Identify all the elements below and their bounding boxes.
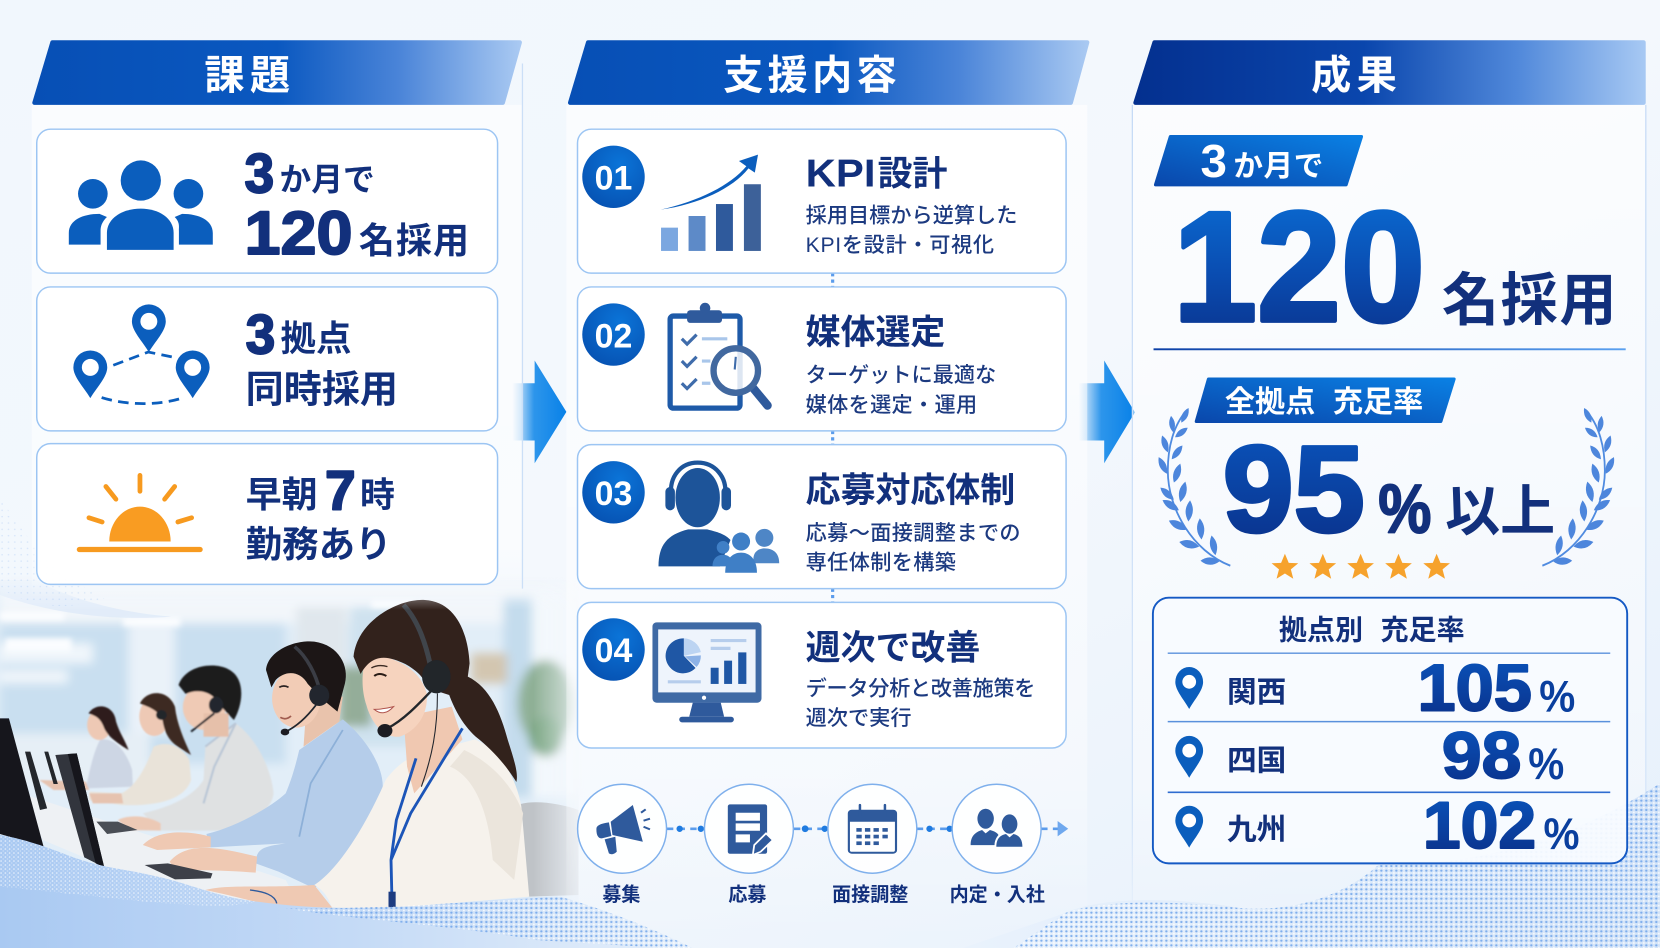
- panel: support: [566, 42, 1088, 942]
- table: fill rate by site: 充足率: [1381, 614, 1465, 645]
- step: apply: 応募: [728, 884, 766, 906]
- icon: three location pins: [73, 304, 210, 404]
- badge: 3 months: 3: [1201, 135, 1227, 187]
- row: Kyushu: 102: [1423, 789, 1536, 862]
- text: weekly improvement: [806, 629, 1035, 730]
- step: offer and onboarding: [950, 784, 1045, 906]
- top dotted wave: [4, 592, 170, 618]
- big number: 95% or more: 95: [1223, 421, 1365, 558]
- text: 7am early shifts: 7: [325, 458, 356, 521]
- text: KPI design: [806, 152, 1017, 257]
- row: Shikoku: %: [1528, 740, 1564, 789]
- heading: results: [1135, 42, 1644, 103]
- step: offer and onboarding: 内定・入社: [950, 884, 1045, 906]
- panel: results: [957, 42, 1660, 948]
- badge: all-site fill rate: 全拠点: [1225, 385, 1315, 419]
- text: 3 months, 120 hires: 3: [245, 142, 274, 205]
- row: Kansai: [1175, 651, 1575, 724]
- arrow: support to result: [1079, 361, 1135, 463]
- step: recruit: [578, 784, 667, 906]
- dotted wave: bottom right: [957, 783, 1660, 948]
- text: weekly improvement: 週次で実行: [806, 706, 912, 730]
- row: Kansai: 105: [1418, 651, 1532, 724]
- card 04: weekly improvement: [578, 602, 1066, 748]
- big number: 95% or more: %: [1378, 471, 1431, 548]
- big number: 95% or more: [1223, 421, 1555, 558]
- foreground monitors: [0, 718, 44, 847]
- text: media selection: 媒体選定: [806, 313, 945, 352]
- row: Shikoku: 98: [1442, 719, 1521, 792]
- keyboard: [145, 863, 212, 879]
- badge: all-site fill rate: 充足率: [1333, 385, 1423, 419]
- text: 3 sites simultaneous hiring: 3: [246, 303, 275, 366]
- card: early 7am shifts: [37, 444, 498, 584]
- text: KPI design: 採用目標から逆算した: [806, 203, 1017, 227]
- text: application handling: 応募〜面接調整までの: [806, 521, 1021, 545]
- far operator: [39, 693, 191, 805]
- stars: [1272, 554, 1450, 579]
- icon: people: [69, 160, 213, 250]
- row: Shikoku: 四国: [1227, 745, 1286, 778]
- panel: challenges: [32, 42, 522, 599]
- number badge 03: 03: [595, 475, 632, 513]
- icon: dashboard monitor: [652, 622, 762, 722]
- text: 7am early shifts: 時: [360, 476, 395, 515]
- process flow: [578, 784, 1068, 906]
- icon: growth chart: [661, 155, 761, 251]
- text: 3 sites simultaneous hiring: [246, 303, 398, 411]
- desk: [21, 793, 296, 900]
- card: 3 sites: [37, 287, 498, 431]
- second operator: [89, 744, 191, 805]
- icon: operator and team: [658, 463, 779, 573]
- number badge 04: [582, 618, 645, 681]
- text: 3 sites simultaneous hiring: 拠点: [281, 318, 351, 358]
- row: Kyushu: 九州: [1227, 814, 1286, 847]
- number badge 03: [582, 461, 645, 524]
- row: Kansai: %: [1539, 672, 1575, 721]
- badge: 3 months: [1156, 135, 1361, 187]
- monitors: [25, 752, 47, 810]
- text: application handling: 応募対応体制: [806, 471, 1015, 510]
- text: 3 months, 120 hires: か月で: [279, 162, 375, 198]
- heading: support: 支援内容: [723, 53, 901, 98]
- icon: sunrise: [79, 475, 200, 549]
- dotted wave: bottom left: [0, 835, 696, 948]
- badge: all-site fill rate: [1196, 379, 1454, 421]
- row: Kyushu: %: [1544, 810, 1580, 859]
- row: Kansai: 関西: [1227, 676, 1286, 709]
- laurel wreath left: [1156, 407, 1230, 566]
- step: interview scheduling: 面接調整: [832, 884, 908, 906]
- big number: 120 hires: 120: [1173, 180, 1425, 355]
- heading: challenges: [34, 42, 520, 103]
- text: 7am early shifts: 勤務あり: [246, 524, 392, 565]
- text: 7am early shifts: 早朝: [246, 474, 318, 515]
- fourth operator: [206, 719, 383, 888]
- dotted wave: top-left faint: [0, 498, 106, 606]
- text: application handling: 専任体制を構築: [806, 551, 956, 575]
- laurel wreath right: [1542, 407, 1617, 566]
- number badge 01: [582, 146, 645, 208]
- text: media selection: ターゲットに最適な: [806, 363, 996, 387]
- text: weekly improvement: データ分析と改善施策を: [806, 676, 1035, 701]
- front operator: [314, 739, 529, 908]
- heading: challenges: 課題: [204, 53, 295, 98]
- heading: results: 成果: [1311, 53, 1402, 98]
- step: recruit: 募集: [602, 884, 640, 906]
- text: 3 months, 120 hires: 120: [245, 199, 353, 268]
- text: 3 sites simultaneous hiring: 同時採用: [246, 368, 398, 411]
- text: 3 months, 120 hires: [245, 142, 469, 268]
- number badge 02: [582, 303, 645, 366]
- divider: [1154, 348, 1626, 350]
- card 02: media selection: [578, 287, 1066, 431]
- heading: support: [570, 42, 1087, 103]
- table: fill rate by site: [1153, 598, 1627, 863]
- step: interview scheduling: [828, 784, 917, 906]
- row: Kyushu: [1175, 789, 1580, 862]
- photo: call-centre operators wearing headsets: [0, 588, 578, 908]
- connectors: [667, 821, 1068, 836]
- icon: clipboard with magnifier: [670, 303, 768, 408]
- arrow: challenge to support: [512, 361, 566, 463]
- card 01: KPI design: [578, 129, 1066, 273]
- text: weekly improvement: 週次で改善: [806, 629, 980, 668]
- table: fill rate by site: 拠点別: [1279, 614, 1363, 645]
- badge: 3 months: か月で: [1233, 150, 1323, 183]
- text: KPI design: KPI: [806, 152, 876, 195]
- number badge 01: 01: [595, 160, 632, 198]
- card 03: application handling: [578, 445, 1066, 589]
- big number: 120 hires: 名採用: [1442, 269, 1617, 333]
- number badge 04: 04: [595, 632, 632, 670]
- step: apply: [704, 784, 793, 906]
- row: Shikoku: [1175, 719, 1564, 792]
- big number: 95% or more: 以上: [1445, 480, 1555, 542]
- third operator: [118, 666, 274, 831]
- text: application handling: [806, 471, 1021, 575]
- card: 120 hires in 3 months: [37, 129, 498, 273]
- text: 7am early shifts: [246, 458, 395, 565]
- big number: 120 hires: [1173, 180, 1617, 355]
- text: KPI design: 設計: [878, 154, 948, 193]
- number badge 02: 02: [595, 317, 632, 355]
- text: 3 months, 120 hires: 名採用: [359, 220, 469, 261]
- text: media selection: 媒体を選定・運用: [806, 393, 977, 417]
- text: KPI design: KPIを設計・可視化: [806, 233, 994, 257]
- text: media selection: [806, 313, 996, 417]
